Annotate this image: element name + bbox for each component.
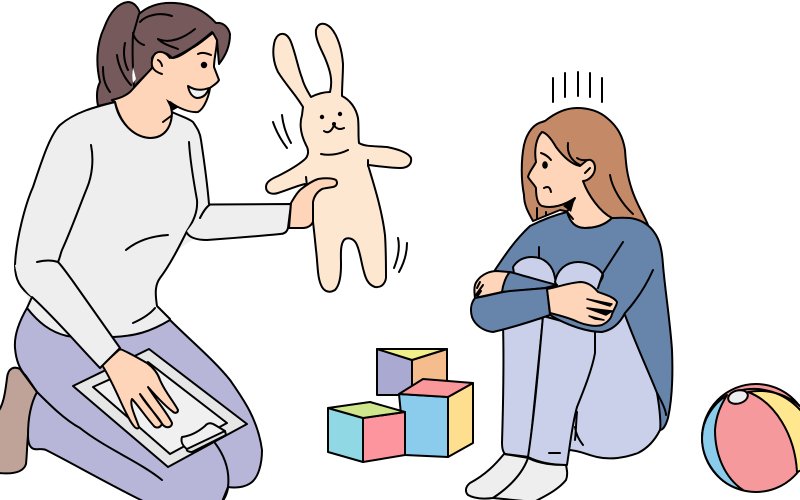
sweater forearm <box>187 204 291 240</box>
gap behind neck <box>132 67 136 83</box>
icon: beach ball <box>702 384 800 492</box>
worry lines <box>553 72 602 102</box>
leg creases <box>549 393 666 453</box>
hand holding bunny <box>289 178 337 228</box>
panel: girl <box>466 72 672 500</box>
neck and face <box>112 32 219 138</box>
face and neck <box>528 132 612 228</box>
front left block <box>328 402 405 462</box>
sweater fold <box>538 247 540 258</box>
sock two <box>493 458 567 500</box>
hair strands <box>103 14 212 92</box>
panel: woman therapist <box>0 2 291 500</box>
hand on clipboard <box>102 349 178 428</box>
pants back <box>560 315 660 458</box>
left hand <box>474 271 509 298</box>
clipboard <box>73 349 247 467</box>
right hand <box>547 282 617 326</box>
sweater outline <box>15 102 209 323</box>
fingers <box>587 299 612 320</box>
hair top <box>133 3 230 87</box>
leg two <box>528 316 595 465</box>
sweater arm <box>15 260 120 368</box>
icon: back foot <box>0 368 37 473</box>
leg one <box>502 318 543 457</box>
motion lines <box>273 115 407 272</box>
panel: toy blocks <box>328 349 473 462</box>
face details <box>163 53 211 122</box>
sweater outline <box>495 212 672 430</box>
pant crease lines <box>37 392 228 500</box>
sleeve lower <box>471 288 550 332</box>
ponytail <box>97 2 165 106</box>
bunny face <box>306 112 368 186</box>
sweater body <box>495 212 672 430</box>
pants <box>15 308 262 500</box>
sweater body <box>15 102 209 337</box>
sleeve right arm <box>550 242 653 332</box>
front right block <box>399 379 473 457</box>
knees <box>513 257 556 287</box>
sock one <box>466 454 529 499</box>
back block <box>377 349 447 395</box>
ear <box>152 52 170 74</box>
sleeve strip <box>502 272 557 292</box>
panel: toy bunny <box>266 24 411 292</box>
face details <box>537 143 633 219</box>
hair <box>522 108 648 225</box>
